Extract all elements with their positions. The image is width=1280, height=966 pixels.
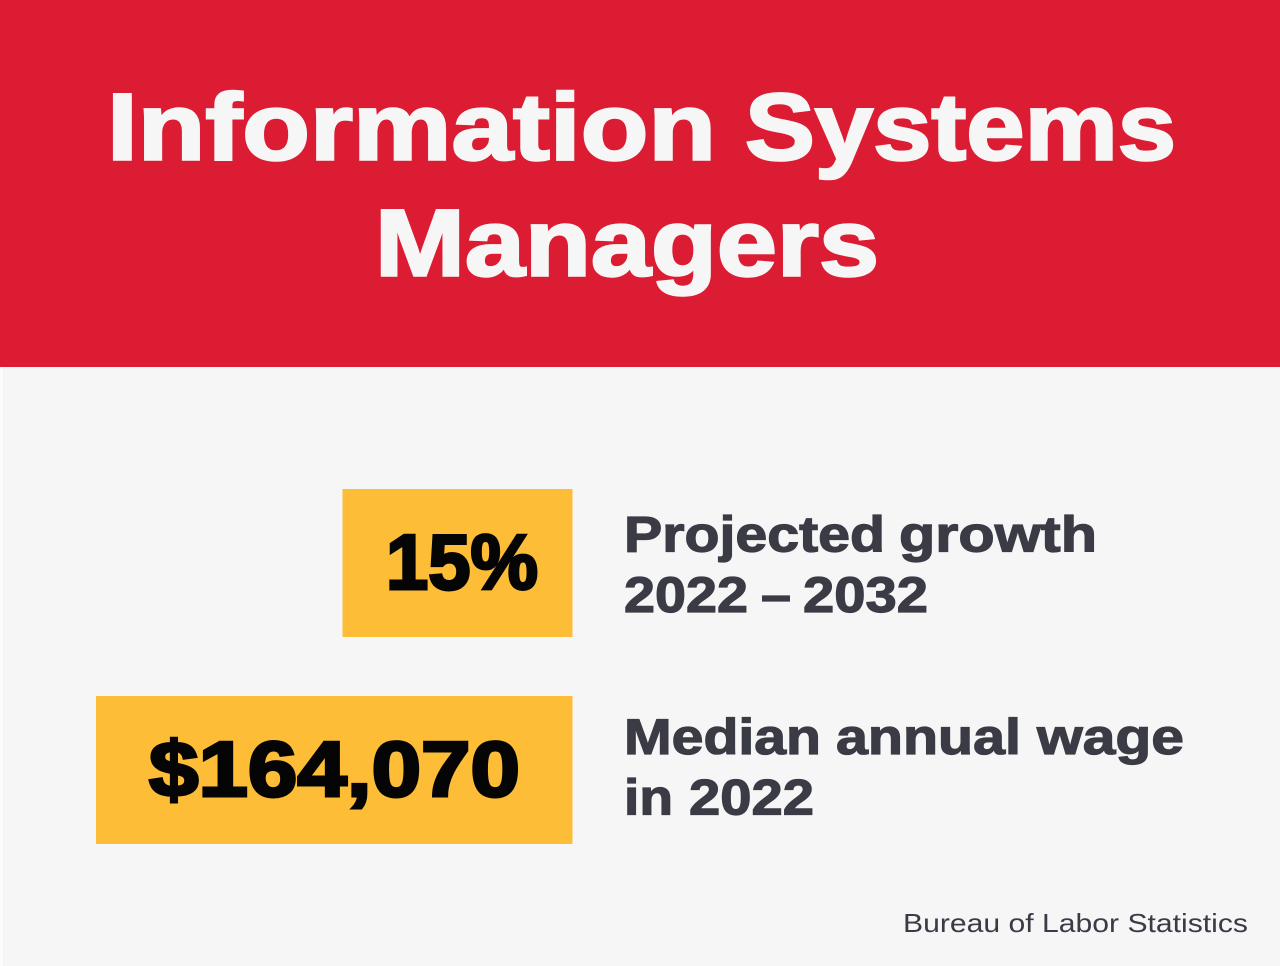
label: median annual wage: in [624, 770, 673, 826]
label: median annual wage: annual [836, 709, 1021, 765]
label: median annual wage: 2022 [689, 770, 814, 826]
title [107, 74, 1176, 296]
label: median annual wage: wage [1036, 709, 1184, 765]
label: projected growth [624, 506, 1097, 623]
label: projected growth: 2022 [624, 567, 748, 623]
stat box: $164,070 [96, 696, 572, 844]
stat box: 15%: 15% [386, 518, 538, 606]
title: Managers [375, 190, 879, 296]
title: Systems [745, 74, 1176, 180]
label: projected growth: growth [899, 506, 1097, 562]
label: projected growth: 2032 [803, 567, 928, 623]
label: median annual wage: Median [624, 709, 821, 765]
stat: median wage [96, 696, 1184, 844]
stat: projected growth [342, 489, 1097, 637]
header banner [0, 0, 1280, 367]
stat box: $164,070: $164,070 [149, 725, 520, 813]
label: projected growth: – [761, 567, 791, 623]
label: projected growth: Projected [624, 506, 885, 562]
label: median annual wage [624, 709, 1184, 826]
title: Information [107, 74, 716, 180]
source credit: Bureau of Labor Statistics [903, 908, 1248, 938]
stat box: 15% [342, 489, 572, 637]
